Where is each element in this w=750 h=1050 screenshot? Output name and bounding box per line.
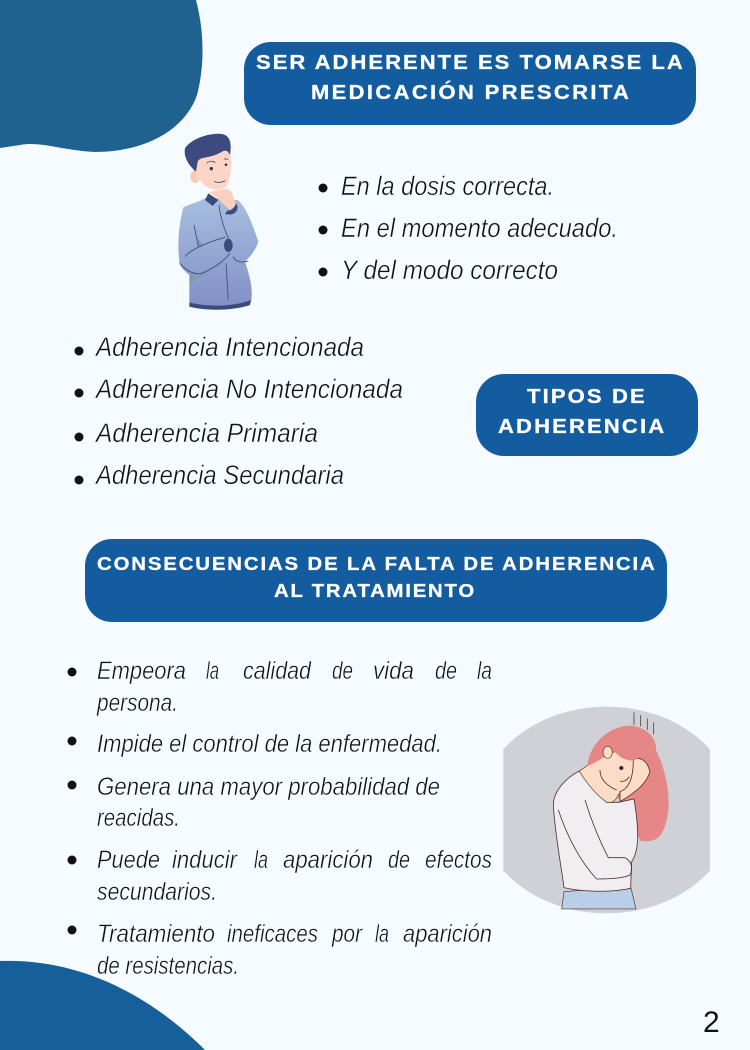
list: consecuencias: calidad — [243, 657, 312, 685]
list: consecuencias: Empeora — [97, 657, 186, 685]
list: consecuencias: aparición — [283, 846, 373, 874]
list: consecuencias: vida — [373, 657, 414, 685]
list: consecuencias: la — [375, 920, 389, 948]
list: consecuencias: Puede — [97, 846, 160, 874]
list: cuando tomar la medicación — [318, 171, 618, 285]
list: tipos de adherencia: Adherencia Intencionada — [94, 332, 364, 362]
list: consecuencias: la — [254, 846, 268, 874]
icon: thinking man — [178, 134, 258, 310]
list: consecuencias: de — [435, 657, 457, 685]
page number: 2 — [703, 1006, 720, 1039]
heading: consecuencias: CONSECUENCIAS DE LA FALTA DE ADHERENCIA — [97, 554, 655, 575]
list: consecuencias: de resistencias. — [97, 952, 239, 980]
decorative blob: top left — [0, 0, 203, 152]
heading: consecuencias — [85, 539, 667, 622]
list: consecuencias: aparición — [403, 920, 492, 948]
icon: worried woman — [503, 706, 710, 914]
list: consecuencias: persona. — [96, 689, 178, 717]
list: consecuencias: Tratamiento — [97, 920, 215, 948]
list: consecuencias: efectos — [425, 846, 492, 874]
list: tipos de adherencia: Adherencia Primaria — [94, 418, 318, 448]
list: consecuencias — [68, 657, 492, 980]
list: consecuencias: de — [388, 846, 410, 874]
heading: ser adherente: SER ADHERENTE ES TOMARSE LA — [256, 52, 683, 74]
decorative blob: bottom left — [0, 961, 205, 1050]
list: consecuencias: de — [332, 657, 353, 685]
list: consecuencias: ineficaces — [227, 920, 318, 948]
heading: tipos de adherencia — [476, 374, 698, 456]
list: consecuencias: por — [331, 920, 363, 948]
heading: tipos de adherencia: TIPOS DE — [527, 386, 645, 408]
list: consecuencias: reacidas. — [97, 804, 180, 832]
heading: consecuencias: AL TRATAMIENTO — [274, 581, 474, 602]
list: tipos de adherencia — [74, 332, 403, 490]
list: consecuencias: inducir — [172, 846, 238, 874]
list: consecuencias: secundarios. — [97, 878, 217, 906]
list: consecuencias: Genera una mayor probabilidad de — [97, 773, 440, 801]
list: cuando tomar la medicación: En la dosis correcta. — [341, 171, 554, 201]
list: consecuencias: Impide el control de la enfermedad. — [97, 730, 442, 758]
heading: ser adherente: MEDICACIÓN PRESCRITA — [311, 81, 629, 104]
list: cuando tomar la medicación: Y del modo correcto — [341, 255, 558, 285]
list: consecuencias: la — [477, 657, 492, 685]
heading: tipos de adherencia: ADHERENCIA — [498, 416, 664, 438]
list: tipos de adherencia: Adherencia Secundaria — [94, 460, 344, 490]
list: cuando tomar la medicación: En el momento adecuado. — [341, 213, 618, 243]
heading: ser adherente — [244, 42, 696, 125]
list: consecuencias: la — [206, 657, 219, 685]
list: tipos de adherencia: Adherencia No Intencionada — [94, 374, 403, 404]
